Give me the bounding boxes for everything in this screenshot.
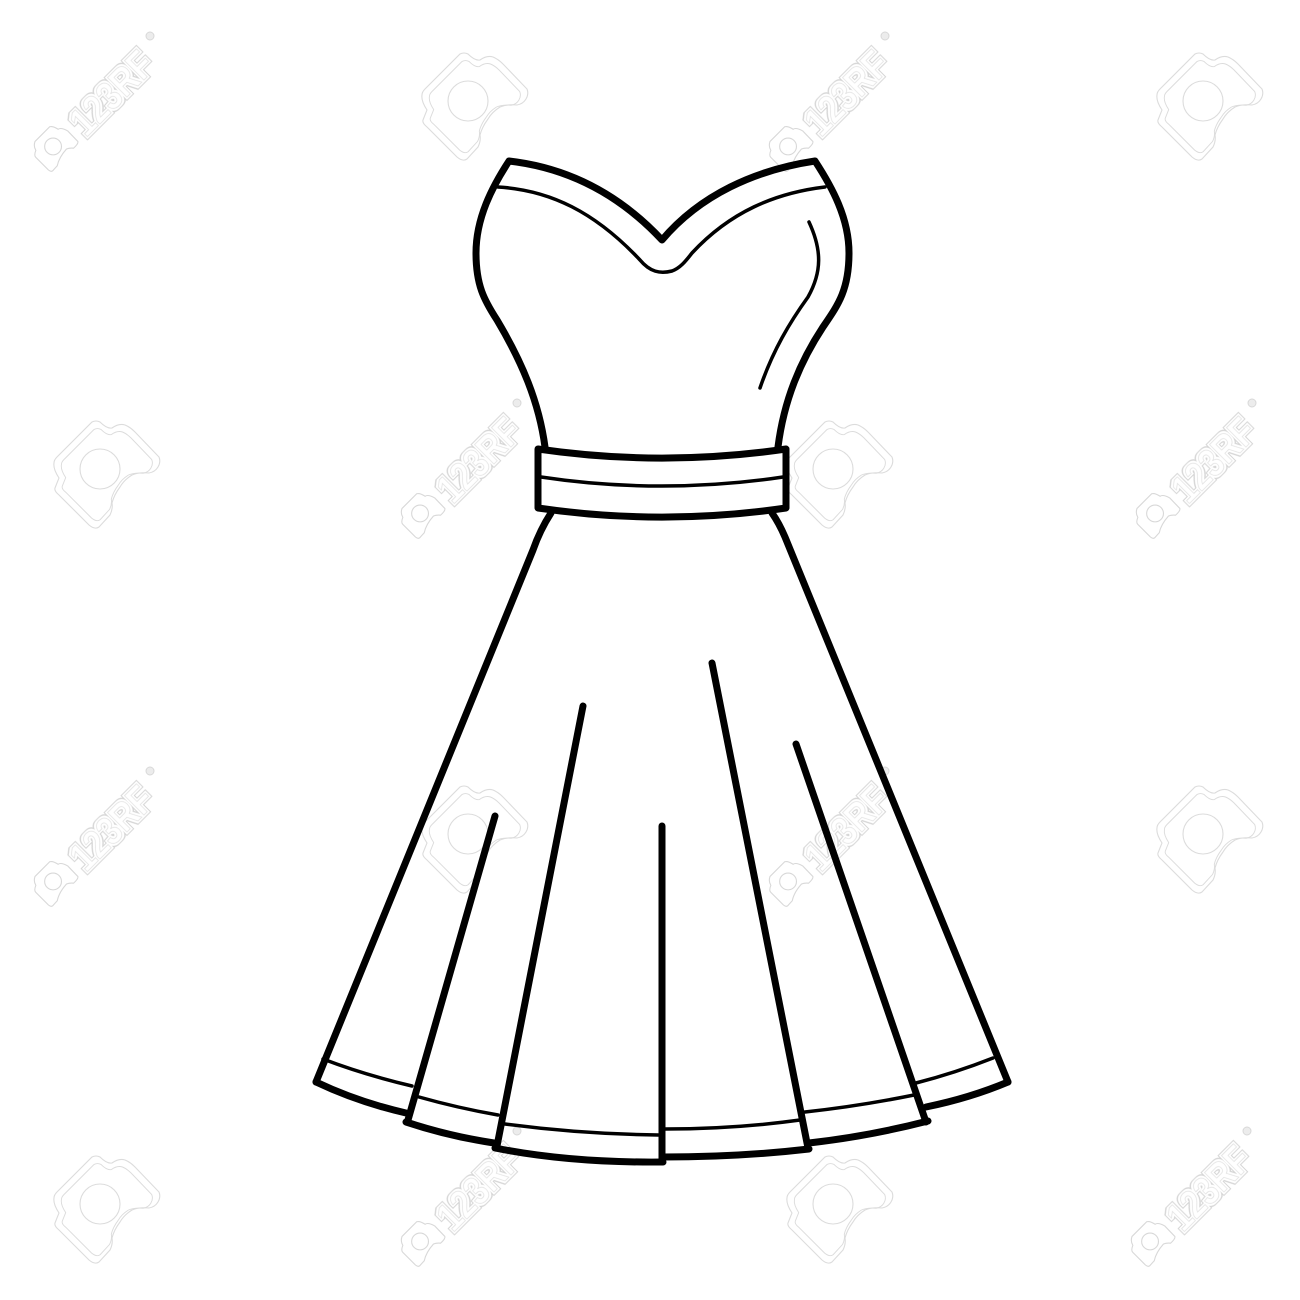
watermark: 123RF logo bottom row right [1131,1127,1260,1266]
watermark: egg logo bottom row right [787,1156,893,1263]
watermark: 123RF logo bottom row left: 123RF [428,1138,530,1239]
skirt [316,513,1008,1162]
watermark: egg logo top row left [422,53,528,160]
watermark: 123RF logo top centre: 123RF [796,43,898,144]
skirt right edge [772,513,1008,1082]
watermark: 123RF logo second row left [401,399,530,538]
bodice [476,161,849,447]
watermark: 123RF logo third row left [34,767,163,906]
watermark: 123RF logo third row centre: 123RF [796,778,898,879]
watermark: egg logo second row left [54,421,160,528]
skirt pleat lines [408,663,926,1160]
skirt left edge [316,513,551,1082]
watermark: egg logo bottom row left [54,1156,160,1263]
watermark: 123RF logo third row centre [769,767,898,906]
hem trim line segments [323,1058,993,1135]
watermark: egg logo third row right [1157,786,1263,893]
dress illustration [316,161,1008,1162]
hem outer edge segments [316,1082,1008,1162]
belt outline [538,449,786,517]
watermark: 123RF logo third row left: 123RF [61,778,163,879]
watermark: 123RF logo top left [34,32,163,171]
watermark: 123RF logo top centre [769,32,898,171]
waist belt [538,449,786,517]
watermark: 123RF logo second row left: 123RF [428,410,530,511]
watermark: 123RF logo second row right: 123RF [1163,410,1265,511]
bodice side seam [760,222,819,388]
watermark: 123RF logo second row right [1136,399,1265,538]
neckline trim line [498,187,825,272]
bodice outline with sweetheart neckline [476,161,849,447]
watermark: egg logo top row right [1157,53,1263,160]
watermark: 123RF logo top left: 123RF [61,43,163,144]
watermark: egg logo second row right [787,421,893,528]
belt centre line [541,477,783,486]
watermark: 123RF logo bottom row left [401,1127,530,1266]
watermark: 123RF logo bottom row right: 123RF [1158,1138,1260,1239]
watermark: egg logo third row left [422,786,528,893]
